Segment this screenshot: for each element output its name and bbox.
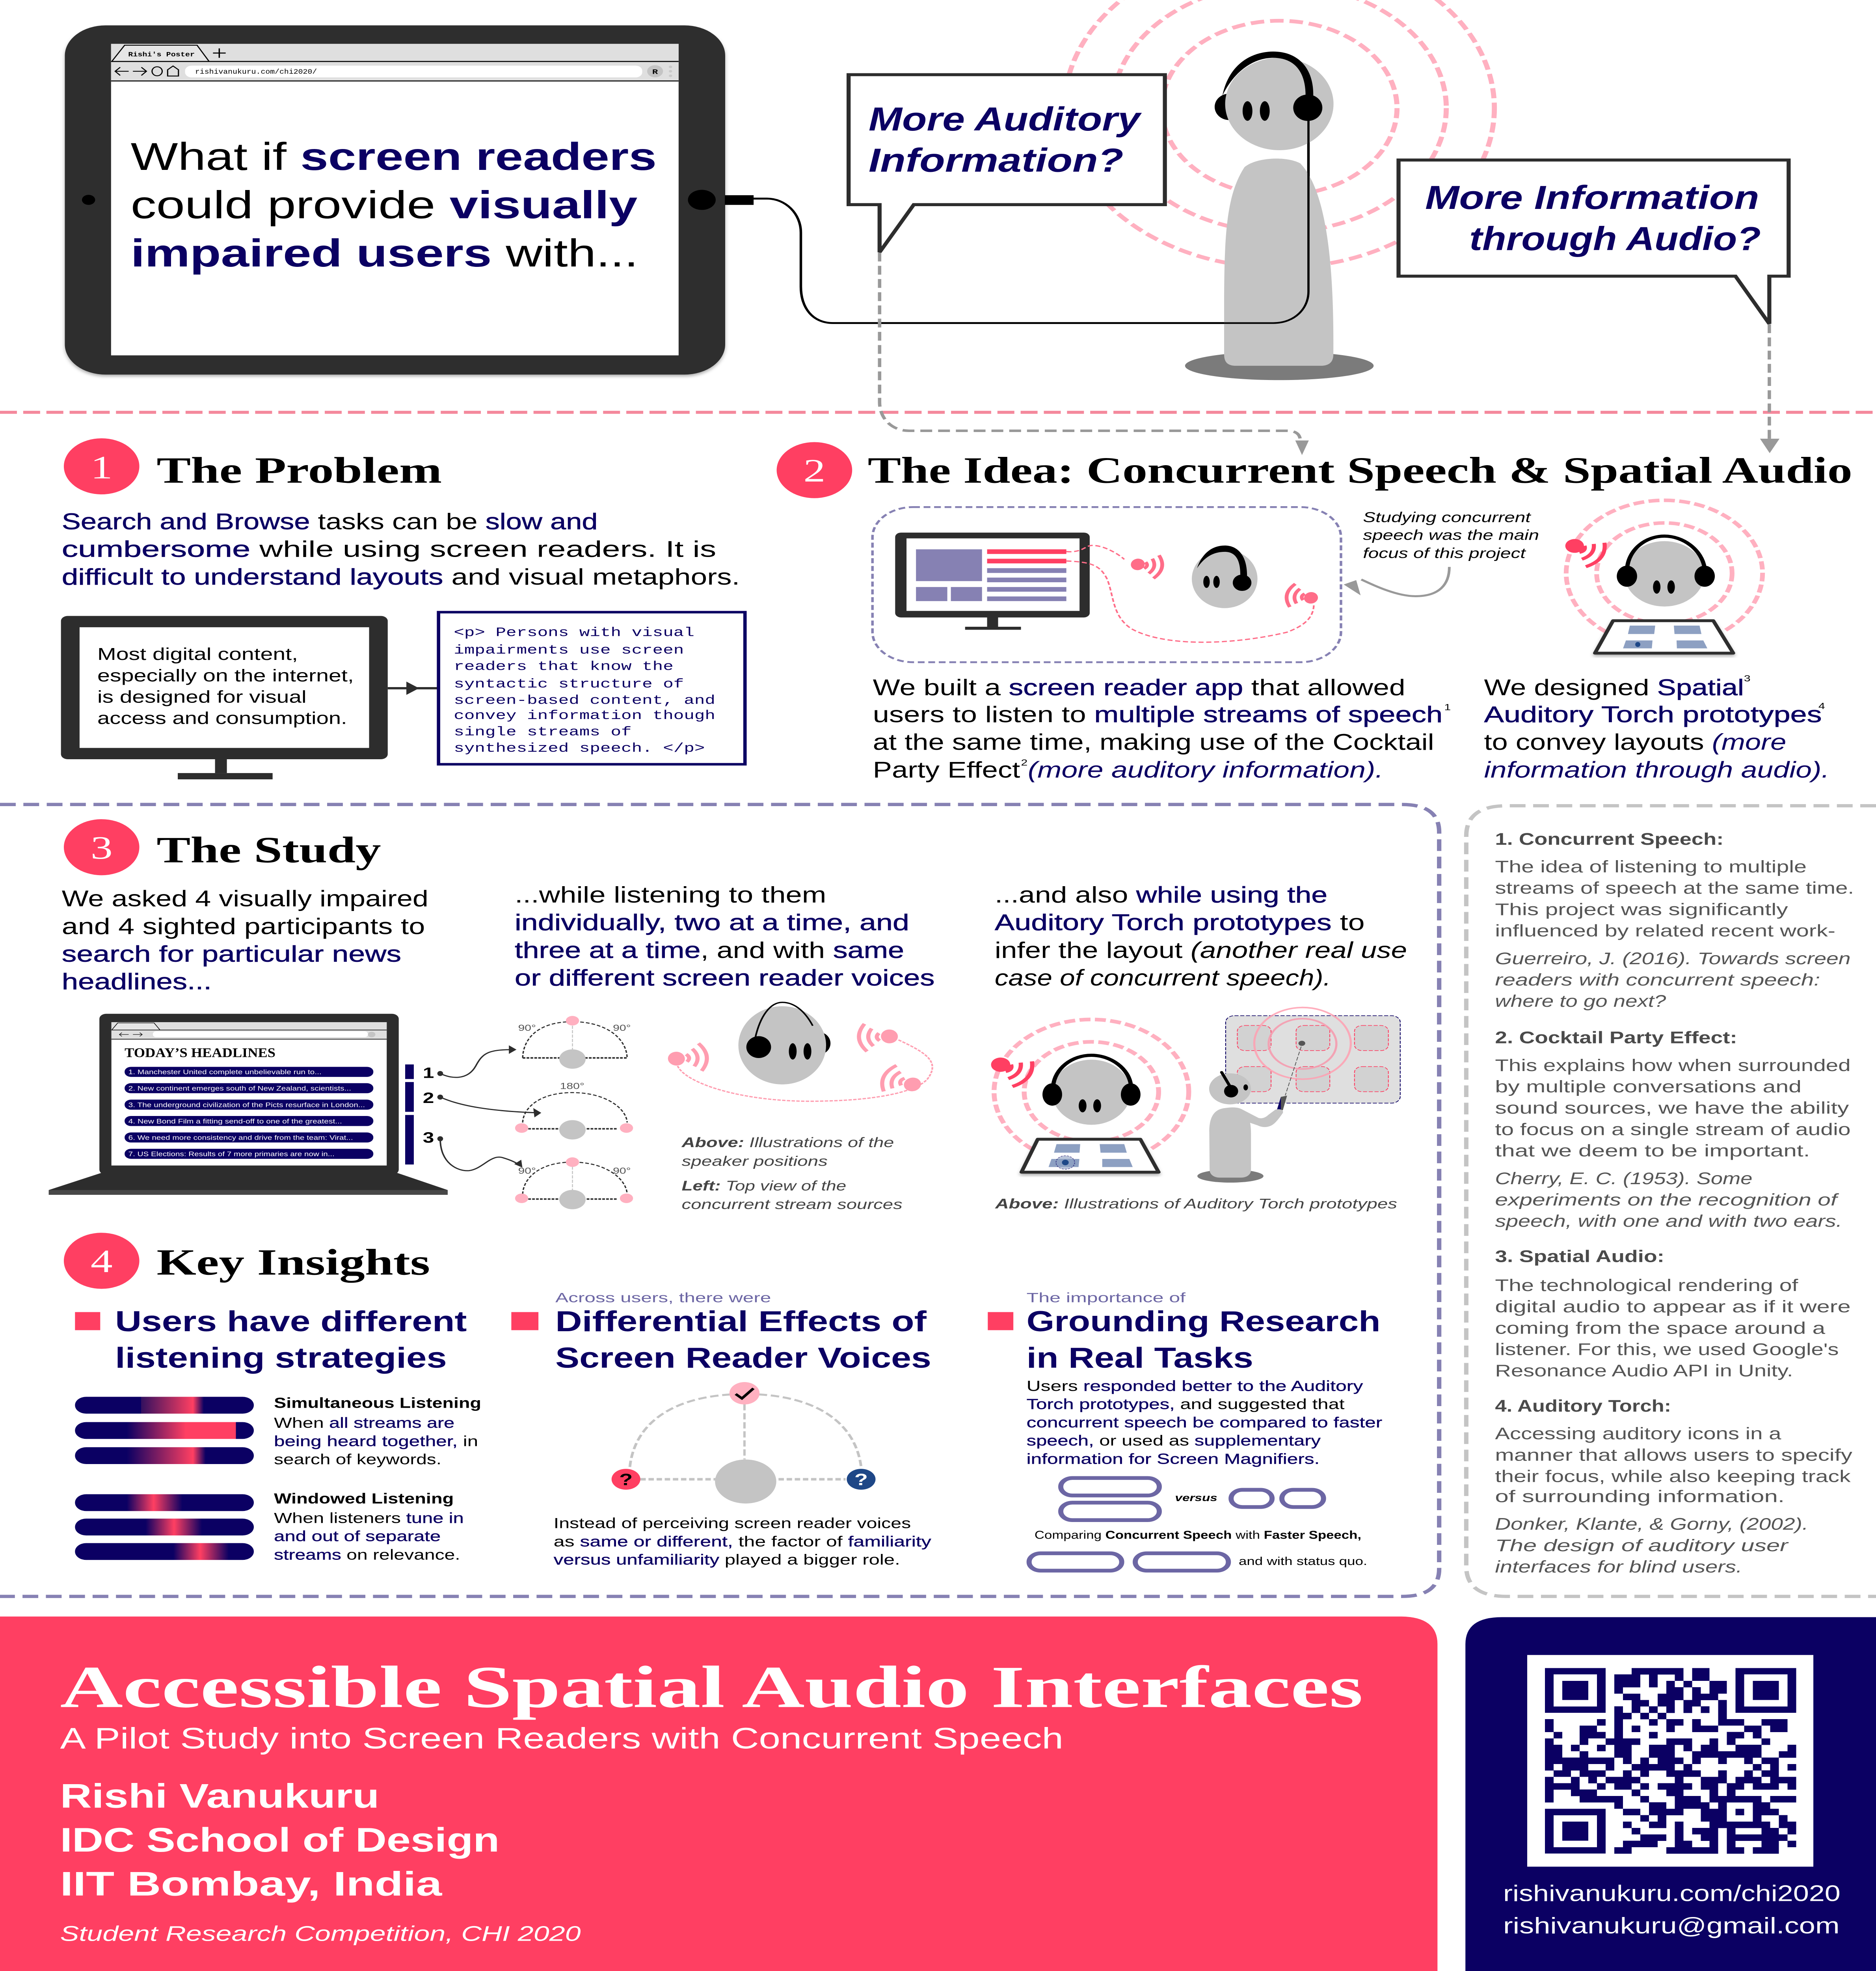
- text: screen reader app: We built a screen reader app that allowed: [873, 675, 1405, 700]
- text: simultaneous listening: being heard together, in: [274, 1433, 478, 1449]
- monitor with digital content text: Most digital content,: [97, 644, 298, 663]
- caption: auditory torch prototypes: Above: Illustrations of Auditory Torch prototypes: [995, 1196, 1397, 1211]
- code box: syntactic structure of: [454, 677, 684, 691]
- contact links: [1503, 1881, 1841, 1938]
- text: listening conditions: ...while listening to them: [515, 882, 826, 907]
- definition: concurrent speech: The idea of listening to multiple: [1495, 857, 1807, 876]
- label: comparing concurrent speech: Comparing Concurrent Speech with Faster Speech,: [1035, 1529, 1361, 1541]
- label: status quo: and with status quo.: [1239, 1555, 1367, 1568]
- arrow: information through audio to spatial audio: [1760, 324, 1779, 453]
- code box: synthesized speech. </p>: [454, 741, 705, 756]
- definition: concurrent speech: This project was significantly: [1495, 900, 1788, 919]
- insight 2: differential effects of voices: [511, 1290, 931, 1568]
- code box: convey information though: [454, 708, 715, 723]
- definition: cocktail party effect: by multiple conversations and: [1495, 1077, 1802, 1096]
- icon: tablet with browser and question: [65, 25, 725, 374]
- icon: tablet with browser and question: rishivanukuru.com/chi2020/: [195, 68, 317, 76]
- text: listening conditions: or different screen reader voices: [515, 965, 934, 991]
- contact links: rishivanukuru@gmail.com: [1503, 1913, 1840, 1938]
- text: the problem: difficult to understand layouts and visual metaphors.: [62, 564, 740, 589]
- stream bars: windowed: [75, 1494, 254, 1560]
- text: real tasks: concurrent speech be compared to faster: [1027, 1414, 1382, 1431]
- caption: speaker positions: Left: Top view of the: [682, 1178, 846, 1193]
- headline list: 6. We need more consistency and drive from the team: Virat...: [128, 1134, 353, 1142]
- code box: readers that know the: [454, 659, 674, 674]
- text: windowed listening: and out of separate: [274, 1528, 441, 1544]
- text: study participants: headlines...: [62, 969, 212, 994]
- diagram: stream positions 2: 180°: [560, 1081, 584, 1091]
- curved arrows to stream diagrams: [440, 1047, 540, 1171]
- conference note: Student Research Competition, CHI 2020: [60, 1922, 581, 1945]
- speech bubble: more information through audio: More Information: [1425, 179, 1759, 216]
- definition: concurrent speech: influenced by related recent work-: [1495, 921, 1835, 940]
- speech bubble: more information through audio: [1399, 160, 1789, 324]
- headline list: 3. The underground civilization of the Picts resurface in London...: [128, 1101, 365, 1109]
- monitor with digital content text: [61, 616, 388, 779]
- illustration: spatial audio listener with tablet: [1557, 500, 1762, 653]
- contact links: rishivanukuru.com/chi2020: [1503, 1881, 1841, 1906]
- section heading: the idea: [777, 442, 1852, 498]
- definition: cocktail party effect: to focus on a single stream of audio: [1495, 1120, 1851, 1139]
- illustration: auditory torch listener with tablet: [983, 1019, 1189, 1172]
- text: familiarity: as same or different, the factor of familiarity: [554, 1533, 931, 1550]
- text: real tasks: Torch prototypes, and suggested that: [1027, 1396, 1344, 1412]
- figure: person with torch: [1197, 1072, 1287, 1183]
- section heading: the problem: The Problem: [156, 450, 442, 491]
- arrow: auditory information to concurrent speech: [880, 253, 1309, 455]
- section heading: key insights: 4: [91, 1243, 113, 1280]
- text: the problem: [62, 509, 740, 589]
- text: screen reader app: [873, 675, 1451, 782]
- text: screen reader app: users to listen to multiple streams of speech: [873, 702, 1442, 727]
- definition: auditory torch: of surrounding information.: [1495, 1487, 1785, 1506]
- text: listening conditions: three at a time, and with same: [515, 937, 904, 963]
- icon: sound source: [1557, 531, 1610, 569]
- definition: spatial audio: 3. Spatial Audio:: [1495, 1247, 1664, 1266]
- icon: sound source left: [1128, 552, 1165, 579]
- caption: speaker positions: concurrent stream sources: [682, 1196, 903, 1212]
- definition: auditory torch: [1495, 1396, 1853, 1576]
- text: study participants: search for particular news: [62, 941, 401, 967]
- text: familiarity: [554, 1515, 931, 1568]
- definition: concurrent speech: streams of speech at the same time.: [1495, 878, 1854, 897]
- headline question: What if screen readers: [131, 134, 657, 178]
- text: auditory torch use: case of concurrent speech).: [995, 965, 1331, 991]
- insight 2: differential effects of voices: Across users, there were: [555, 1290, 771, 1305]
- text: simultaneous listening: [274, 1395, 481, 1468]
- monitor with digital content text: access and consumption.: [97, 708, 347, 728]
- author details: Rishi Vanukuru: [60, 1777, 379, 1815]
- sidebar: definitions and references: [1495, 829, 1854, 1576]
- code box: impairments use screen: [454, 643, 684, 658]
- headline list: 1. Manchester United complete unbelievable run to...: [128, 1069, 322, 1076]
- definition: cocktail party effect: that we deem to be important.: [1495, 1141, 1810, 1160]
- diagram: stream positions 1: 90°: [613, 1023, 631, 1033]
- definition: auditory torch: manner that allows users to specify: [1495, 1446, 1853, 1464]
- illustration: person pointing torch at panel: [1197, 1008, 1400, 1183]
- text: spatial auditory torch: [1484, 673, 1829, 782]
- definition: cocktail party effect: experiments on the recognition of: [1495, 1190, 1839, 1209]
- diagram: stream positions 2: [515, 1081, 633, 1140]
- illustration: top view of head with speakers: [666, 1002, 932, 1101]
- monitor with digital content text: especially on the internet,: [97, 666, 354, 685]
- definition: auditory torch: Donker, Klante, & Gorny, (2002).: [1495, 1515, 1808, 1533]
- illustration: laptop with headlines: TODAY’S HEADLINES: [125, 1045, 275, 1060]
- text: windowed listening: When listeners tune in: [274, 1510, 464, 1526]
- text: spatial auditory torch: 3: [1744, 673, 1751, 683]
- text: screen reader app: at the same time, making use of the Cocktail: [873, 730, 1434, 755]
- text: auditory torch use: ...and also while using the: [995, 882, 1327, 907]
- footer panel: title and authors: [0, 1617, 1437, 1971]
- section heading: the problem: 1: [91, 449, 113, 486]
- subtitle: A Pilot Study into Screen Readers with Concurrent Speech: [60, 1722, 1063, 1755]
- text: screen reader app: 1: [1444, 702, 1451, 712]
- definition: cocktail party effect: [1495, 1028, 1851, 1231]
- QR code: [1545, 1668, 1796, 1854]
- definition: spatial audio: listener. For this, we used Google's: [1495, 1340, 1839, 1359]
- cable from tablet to headphones: [725, 104, 1308, 323]
- text: real tasks: [1027, 1378, 1382, 1467]
- caption: speaker positions: speaker positions: [682, 1153, 828, 1169]
- section heading: the idea: 2: [803, 453, 825, 489]
- icon: speaker left: [666, 1043, 708, 1073]
- speech bubble: more auditory information: More Auditory: [869, 101, 1142, 138]
- definition: concurrent speech: [1495, 829, 1854, 1010]
- text: screen reader app: Party Effect: [873, 757, 1020, 782]
- definition: concurrent speech: where to go next?: [1495, 991, 1666, 1010]
- brackets with numbers 1 2 3: 3: [423, 1129, 434, 1146]
- icon: tablet with browser and question: Rishi's Poster: [128, 51, 195, 59]
- definition: spatial audio: [1495, 1247, 1851, 1380]
- panel outline: study and insights: [0, 805, 1439, 1597]
- icon: monitor with layout: [895, 533, 1090, 630]
- definition: cocktail party effect: speech, with one and with two ears.: [1495, 1211, 1842, 1231]
- icon: sound source right: [1284, 583, 1321, 610]
- label: versus: versus: [1175, 1492, 1217, 1503]
- definition: auditory torch: Accessing auditory icons in a: [1495, 1424, 1781, 1443]
- text: simultaneous listening: When all streams are: [274, 1415, 454, 1431]
- text: windowed listening: streams on relevance.: [274, 1546, 460, 1563]
- text: listening conditions: individually, two at a time, and: [515, 910, 909, 935]
- insight 3: grounding research: Grounding Research: [1027, 1305, 1381, 1338]
- pills: concurrent versus faster speech: [1061, 1478, 1323, 1520]
- author details: IIT Bombay, India: [60, 1865, 443, 1903]
- icon: tablet layout: [1595, 621, 1733, 653]
- definition: auditory torch: their focus, while also keeping track: [1495, 1467, 1851, 1486]
- section heading: the study: 3: [91, 830, 113, 866]
- text: spatial auditory torch: We designed Spatial: [1484, 675, 1744, 700]
- definition: spatial audio: digital audio to appear as if it were: [1495, 1297, 1851, 1316]
- icon: speaker top right: [858, 1022, 899, 1052]
- diagram: stream positions 1: [518, 1016, 631, 1069]
- text: spatial auditory torch: information through audio).: [1484, 757, 1829, 782]
- section heading: the study: [64, 819, 381, 875]
- text: real tasks: speech, or used as supplementary: [1027, 1433, 1321, 1449]
- text: simultaneous listening: Simultaneous Listening: [274, 1395, 481, 1411]
- text: spatial auditory torch: Auditory Torch prototypes: [1484, 702, 1822, 727]
- text: screen reader app: 2: [1021, 758, 1027, 768]
- definition: auditory torch: 4. Auditory Torch:: [1495, 1396, 1671, 1415]
- text: windowed listening: [274, 1490, 464, 1563]
- headline question: [131, 134, 657, 275]
- icon: listener with headphones: [1185, 52, 1374, 380]
- definition: cocktail party effect: This explains how when surrounded: [1495, 1056, 1851, 1075]
- text: auditory torch use: infer the layout (another real use: [995, 937, 1407, 963]
- pink divider under hero: [0, 412, 1876, 413]
- definition: auditory torch: The design of auditory user: [1495, 1536, 1789, 1555]
- speech bubble: more auditory information: Information?: [869, 142, 1123, 179]
- brackets with numbers 1 2 3: 1: [423, 1064, 434, 1081]
- insight 2: differential effects of voices: Screen Reader Voices: [555, 1342, 931, 1374]
- annotation: studying concurrent speech: speech was the main: [1363, 527, 1539, 543]
- section heading: the idea: The Idea: Concurrent Speech & Spatial Audio: [868, 450, 1852, 491]
- text: familiarity: versus unfamiliarity played a bigger role.: [554, 1552, 900, 1568]
- definition: concurrent speech: readers with concurrent speech:: [1495, 970, 1820, 989]
- text: real tasks: Users responded better to the Auditory: [1027, 1378, 1363, 1394]
- icon: speaker bottom right: [877, 1064, 927, 1099]
- diagram: stream positions 3: 90°: [613, 1166, 631, 1176]
- insight 1: listening strategies: [75, 1305, 481, 1563]
- insight 1: listening strategies: Users have different: [115, 1305, 467, 1338]
- illustration: laptop with headlines: [49, 1014, 448, 1195]
- diagram: stream positions 1: 90°: [518, 1023, 536, 1033]
- icon: head with headphones: [1192, 546, 1258, 608]
- text: spatial auditory torch: to convey layouts (more: [1484, 730, 1786, 755]
- insight 3: grounding research: [988, 1290, 1382, 1570]
- icon: tablet with browser and question: R: [652, 68, 658, 76]
- caption: speaker positions: [681, 1135, 903, 1212]
- author details: [60, 1777, 499, 1903]
- caption: speaker positions: Above: Illustrations of the: [681, 1135, 894, 1150]
- monitor with digital content text: is designed for visual: [97, 687, 307, 706]
- text: simultaneous listening: search of keywords.: [274, 1451, 441, 1468]
- text: windowed listening: Windowed Listening: [274, 1490, 454, 1507]
- definition: concurrent speech: 1. Concurrent Speech:: [1495, 829, 1723, 848]
- annotation: studying concurrent speech: focus of this project: [1363, 545, 1526, 561]
- speech bubble: more auditory information: [849, 75, 1165, 252]
- icon: sound source: [983, 1049, 1038, 1089]
- text: auditory torch use: [995, 882, 1407, 991]
- pills: status quo: [1029, 1553, 1228, 1570]
- code box: single streams of: [454, 725, 632, 740]
- headline list: 2. New continent emerges south of New Zealand, scientists...: [128, 1085, 351, 1092]
- definition: cocktail party effect: Cherry, E. C. (1953). Some: [1495, 1169, 1752, 1188]
- code box: [439, 612, 745, 764]
- text: study participants: and 4 sighted participants to: [62, 914, 425, 939]
- diagram: voice positions: ?: [854, 1470, 868, 1489]
- insight 3: grounding research: The importance of: [1027, 1290, 1186, 1305]
- text: study participants: We asked 4 visually impaired: [62, 886, 428, 911]
- diagram: stream positions 3: [515, 1157, 633, 1209]
- definition: concurrent speech: Guerreiro, J. (2016). Towards screen: [1495, 949, 1851, 968]
- annotation: studying concurrent speech: Studying concurrent: [1363, 510, 1532, 525]
- code box: <p> Persons with visual: [454, 626, 694, 640]
- brackets with numbers 1 2 3: [405, 1064, 443, 1164]
- text: the problem: Search and Browse tasks can be slow and: [62, 509, 597, 534]
- text: study participants: [62, 886, 428, 994]
- definition: spatial audio: The technological rendering of: [1495, 1276, 1798, 1295]
- poster title: Accessible Spatial Audio Interfaces: [60, 1654, 1363, 1720]
- text: listening conditions: [515, 882, 934, 991]
- speech bubble: more information through audio: through Audio?: [1469, 220, 1761, 257]
- text: real tasks: information for Screen Magnifiers.: [1027, 1451, 1320, 1467]
- author details: IDC School of Design: [60, 1821, 499, 1859]
- text: familiarity: Instead of perceiving screen reader voices: [554, 1515, 911, 1531]
- diagram: voice positions: [612, 1382, 875, 1503]
- definition: spatial audio: Resonance Audio API in Unity.: [1495, 1361, 1793, 1380]
- headline question: could provide visually: [131, 183, 637, 227]
- text: spatial auditory torch: 4: [1818, 701, 1825, 711]
- insight 3: grounding research: in Real Tasks: [1027, 1342, 1253, 1374]
- definition: auditory torch: interfaces for blind users.: [1495, 1557, 1742, 1576]
- headline question: impaired users with...: [131, 231, 638, 275]
- icon: tablet layout with focus: [1022, 1139, 1159, 1172]
- diagram: stream positions 3: 90°: [518, 1166, 536, 1176]
- code box: screen-based content, and: [454, 693, 715, 708]
- diagram: voice positions: ?: [619, 1470, 633, 1489]
- section heading: key insights: Key Insights: [156, 1242, 430, 1283]
- section heading: the problem: [64, 438, 442, 494]
- text: screen reader app: (more auditory information).: [1028, 757, 1383, 782]
- annotation: studying concurrent speech: [1344, 510, 1539, 596]
- panel outline: references sidebar: [1466, 806, 1876, 1597]
- section heading: the study: The Study: [156, 830, 381, 871]
- headline list: 4. New Bond Film a fitting send-off to one of the greatest...: [128, 1118, 342, 1125]
- definition: spatial audio: coming from the space around a: [1495, 1319, 1826, 1338]
- definition: cocktail party effect: sound sources, we have the ability: [1495, 1098, 1849, 1118]
- illustration: concurrent speech screen reader app: [873, 507, 1341, 662]
- insight 1: listening strategies: listening strategies: [115, 1342, 447, 1374]
- definition: cocktail party effect: 2. Cocktail Party Effect:: [1495, 1028, 1737, 1047]
- headline list: 7. US Elections: Results of 7 more primaries are now in...: [128, 1151, 335, 1158]
- text: the problem: cumbersome while using screen readers. It is: [62, 537, 716, 562]
- footer panel: QR and contact: [1465, 1617, 1876, 1971]
- stream bars: simultaneous: [75, 1397, 254, 1464]
- text: auditory torch use: Auditory Torch prototypes to: [995, 910, 1365, 935]
- headline list: [125, 1067, 373, 1159]
- section heading: key insights: [64, 1233, 430, 1289]
- arrow: monitor to code: [388, 682, 439, 695]
- sound rings around listener: [1064, 0, 1494, 268]
- insight 2: differential effects of voices: Differential Effects of: [555, 1305, 927, 1338]
- brackets with numbers 1 2 3: 2: [423, 1090, 434, 1107]
